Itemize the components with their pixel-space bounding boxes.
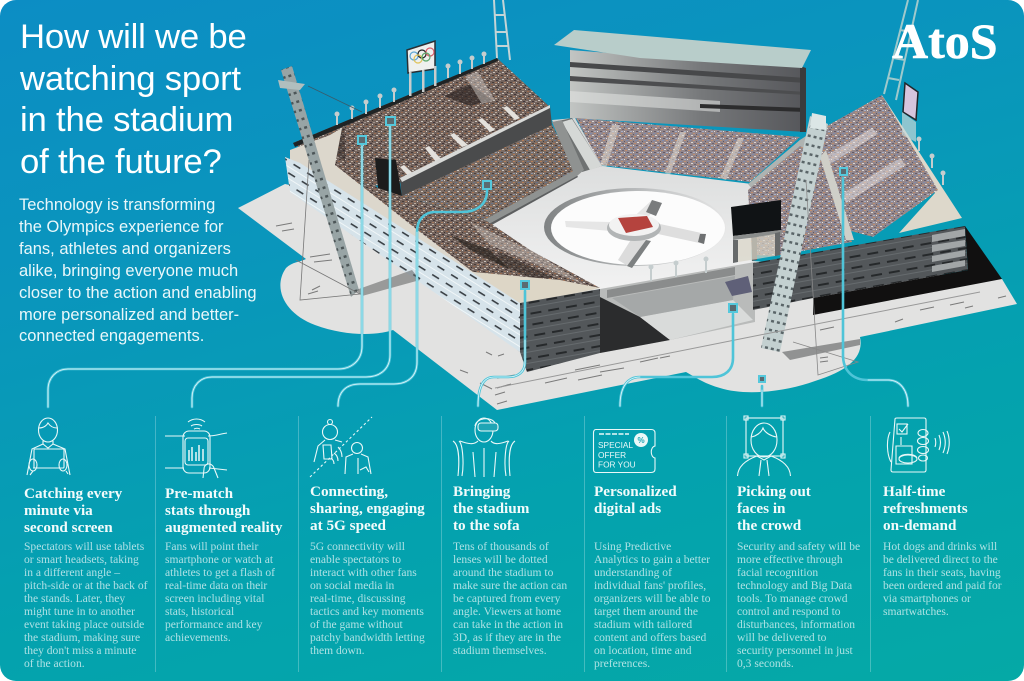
heading xyxy=(24,485,122,536)
back grandstand tower xyxy=(554,30,811,132)
body text: control and respond to xyxy=(737,606,841,618)
heading xyxy=(883,483,968,534)
front-left dark end wall xyxy=(520,289,600,372)
right side billboard xyxy=(902,83,918,142)
body text: preferences. xyxy=(594,658,650,670)
icon: offer ticket xyxy=(592,429,656,473)
panel: digital ads xyxy=(592,429,711,670)
body text: them down. xyxy=(310,645,365,657)
intro text: Technology is transforming xyxy=(19,196,215,214)
body text: Hot dogs and drinks will xyxy=(883,541,997,553)
heading: Personalized xyxy=(594,483,677,500)
stand roof xyxy=(554,30,811,68)
heading: Catching every xyxy=(24,485,122,502)
body text: Using Predictive xyxy=(594,541,671,553)
heading: refreshments xyxy=(883,500,968,517)
body text: event taking place outside xyxy=(24,619,144,631)
body text: make sure the action can xyxy=(453,580,567,592)
body text: or smart headsets, taking xyxy=(24,554,139,566)
walkway line xyxy=(495,292,980,388)
cream corner slab xyxy=(473,272,600,304)
body text: stadium with tailored xyxy=(594,619,692,631)
heading xyxy=(165,485,282,536)
intro text: fans, athletes and organizers xyxy=(19,240,231,258)
intro text: more personalized and better- xyxy=(19,306,239,324)
left upper stand xyxy=(293,58,552,198)
big video screen xyxy=(731,200,782,263)
panel: 5G xyxy=(310,416,425,657)
panel: augmented reality xyxy=(165,418,282,644)
body text: on social media in xyxy=(310,580,394,592)
heading: on-demand xyxy=(883,517,956,534)
intro text: alike, bringing everyone much xyxy=(19,262,238,280)
title: How will we be xyxy=(20,18,247,56)
arena floor xyxy=(487,118,822,292)
intro text: connected engagements. xyxy=(19,327,204,345)
body text: Analytics to gain a better xyxy=(594,554,710,566)
heading xyxy=(453,483,530,534)
body text: smartphone or watch at xyxy=(165,554,273,566)
body text: been ordered and paid for xyxy=(883,580,1002,592)
body text: interact with other fans xyxy=(310,567,417,579)
right upper stand crowd xyxy=(820,95,938,240)
stand floodlights xyxy=(334,52,946,281)
intro text: the Olympics experience for xyxy=(19,218,224,236)
intro text xyxy=(19,196,257,345)
central stage ring xyxy=(544,188,726,266)
body text: individual fans' profiles, xyxy=(594,580,706,592)
left stand outer rim xyxy=(290,58,520,305)
body text: disturbances, information xyxy=(737,619,855,631)
icon: person with VR headset xyxy=(452,418,516,477)
heading: the stadium xyxy=(453,500,529,517)
body text: angle. Viewers at home xyxy=(453,606,561,618)
body text: real-time, discussing xyxy=(310,593,406,605)
body text: understanding of xyxy=(594,567,672,579)
stand front wall xyxy=(400,106,552,198)
body text: be delivered direct to the xyxy=(883,554,998,566)
body text: enable spectators to xyxy=(310,554,401,566)
body text: performance and key xyxy=(165,619,262,631)
back right light mast xyxy=(884,0,918,100)
body text: organizers will be able to xyxy=(594,593,711,605)
body text: tactics and key moments xyxy=(310,606,424,618)
body text: can take in the action in xyxy=(453,619,563,631)
heading: the crowd xyxy=(737,517,801,534)
heading: Half-time xyxy=(883,483,945,500)
heading: sharing, engaging xyxy=(310,500,425,517)
heading: stats through xyxy=(165,502,250,519)
body text: athletes to get a flash of xyxy=(165,567,275,579)
icon: offer ticket: % xyxy=(637,436,645,445)
body text: fans in their seats, having xyxy=(883,567,1001,579)
icon: offer ticket: FOR YOU xyxy=(598,460,636,470)
panel: second screen xyxy=(24,418,148,670)
left lower stand xyxy=(375,120,584,225)
heading: to the sofa xyxy=(453,517,520,534)
body text: achievements. xyxy=(165,632,231,644)
right upper stand plate xyxy=(882,95,962,233)
body text: Security and safety will be xyxy=(737,541,860,553)
icon: two people connecting xyxy=(310,416,372,478)
body text xyxy=(883,541,1002,618)
callout lines xyxy=(48,126,908,407)
body text: in a different angle – xyxy=(24,567,120,579)
body text: will be delivered to xyxy=(737,632,826,644)
heading: minute via xyxy=(24,502,93,519)
heading: at 5G speed xyxy=(310,517,386,534)
title: watching sport xyxy=(20,60,241,98)
icon: person with tablet xyxy=(26,418,70,476)
body text: the stands. Later, they xyxy=(24,593,125,605)
back stand crowd xyxy=(576,118,800,182)
back left light mast xyxy=(494,0,510,60)
panel: refreshments xyxy=(883,418,1002,618)
right facade shadow xyxy=(813,226,1002,315)
heading: Picking out xyxy=(737,483,811,500)
heading xyxy=(737,483,811,534)
body text: content and offers based xyxy=(594,632,706,644)
right lower stand xyxy=(748,146,852,256)
body text: on location, time and xyxy=(594,645,691,657)
title: of the future? xyxy=(20,143,222,181)
body text: be captured from every xyxy=(453,593,560,605)
heading: augmented reality xyxy=(165,519,282,536)
heading: Connecting, xyxy=(310,483,388,500)
body text: screen including vital xyxy=(165,593,264,605)
body text: 5G connectivity will xyxy=(310,541,405,553)
right front light mast xyxy=(761,113,860,375)
body text: Tens of thousands of xyxy=(453,541,549,553)
heading: Bringing xyxy=(453,483,510,500)
Atos logo: AtoS xyxy=(892,13,998,69)
spectators on ground xyxy=(276,223,1006,404)
panel: stadium to the sofa xyxy=(452,418,567,657)
heading xyxy=(310,483,425,534)
body text: they don't miss a minute xyxy=(24,645,136,657)
olympic scoreboard xyxy=(407,41,436,96)
body text: smartwatches. xyxy=(883,606,949,618)
left front light mast xyxy=(278,66,420,300)
body text: technology and Big Data xyxy=(737,580,852,592)
body text: the stadium, making sure xyxy=(24,632,140,644)
body text: lenses will be dotted xyxy=(453,554,548,566)
icon: offer ticket: SPECIAL xyxy=(598,440,633,450)
body text: security personnel in just xyxy=(737,645,853,657)
icon: offer ticket: OFFER xyxy=(598,450,626,460)
panel: facial recognition xyxy=(737,416,860,670)
title: in the stadium xyxy=(20,101,233,139)
body text: 3D, as if they are in the xyxy=(453,632,561,644)
body text: via smartphones or xyxy=(883,593,971,605)
heading: faces in xyxy=(737,500,786,517)
front concourse and stairs xyxy=(600,262,755,353)
olympic rings xyxy=(410,48,434,63)
right facade xyxy=(753,226,968,310)
body text: of the game without xyxy=(310,619,403,631)
callout node markers xyxy=(358,117,847,382)
body text: patchy bandwidth letting xyxy=(310,632,425,644)
heading xyxy=(594,483,677,517)
body text: target them around the xyxy=(594,606,698,618)
body text: 0,3 seconds. xyxy=(737,658,794,670)
body text xyxy=(594,541,711,670)
intro text: closer to the action and enabling xyxy=(19,284,257,302)
body text xyxy=(737,541,860,670)
heading: second screen xyxy=(24,519,113,536)
body text: tools. To manage crowd xyxy=(737,593,848,605)
body text: around the stadium to xyxy=(453,567,553,579)
heading: Pre-match xyxy=(165,485,233,502)
body text: stats, historical xyxy=(165,606,234,618)
body text xyxy=(453,541,567,657)
icon: smartwatch xyxy=(165,418,228,478)
body text xyxy=(24,541,148,670)
body text: Fans will point their xyxy=(165,541,258,553)
body text: Spectators will use tablets xyxy=(24,541,144,553)
body text: of the action. xyxy=(24,658,85,670)
title xyxy=(20,18,247,181)
body text: facial recognition xyxy=(737,567,818,579)
body text: might tune in to another xyxy=(24,606,135,618)
body text xyxy=(310,541,425,657)
body text: real-time data on their xyxy=(165,580,267,592)
icon: smartphone ordering xyxy=(886,418,950,472)
body text xyxy=(165,541,275,644)
cross stage xyxy=(565,200,706,268)
heading: digital ads xyxy=(594,500,661,517)
body text: more effective through xyxy=(737,554,843,566)
ground plate xyxy=(238,184,1017,410)
icon: face scan xyxy=(737,416,791,476)
body text: pitch-side or at the back of xyxy=(24,580,147,592)
left side stand strip xyxy=(330,150,600,288)
left facade xyxy=(285,157,520,352)
body text: stadium themselves. xyxy=(453,645,547,657)
